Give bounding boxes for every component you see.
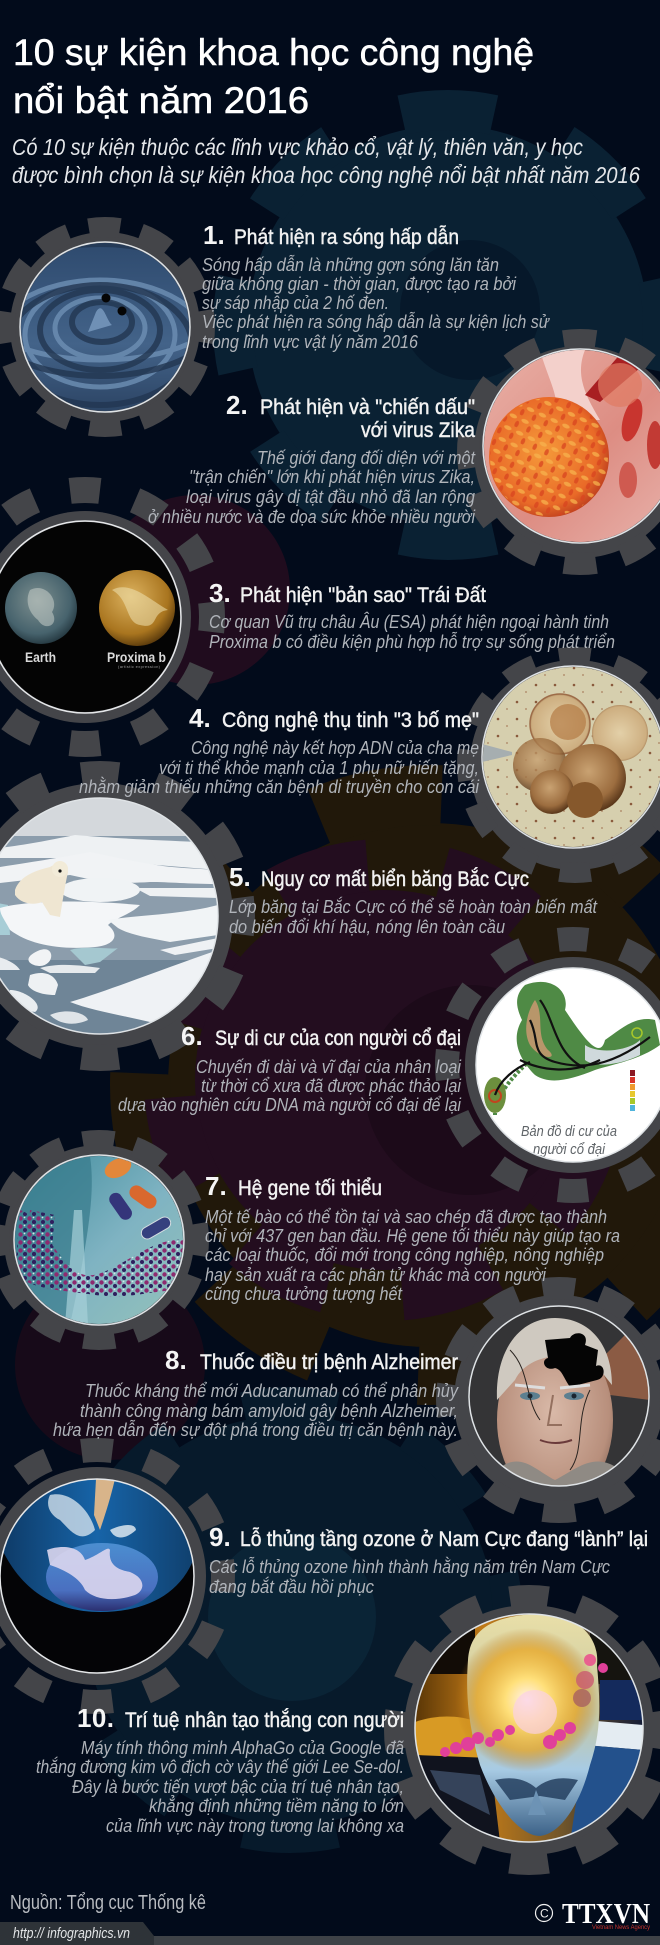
- heading 6: 6.: [181, 1021, 203, 1051]
- photo: Zika virus: [484, 350, 660, 542]
- gear 6: [447, 939, 660, 1191]
- body 7: chỉ với 437 gen ban đầu. Hệ gene tối thiểu này giúp tạo ra: [205, 1226, 620, 1246]
- body 3: Cơ quan Vũ trụ châu Âu (ESA) phát hiện ngoại hành tinh: [209, 612, 609, 632]
- photo: Earth and Proxima b: [0, 522, 180, 712]
- body 2: "trận chiến" lớn khi phát hiện virus Zika,: [189, 467, 475, 487]
- body 4: nhằm giảm thiểu những căn bệnh di truyền cho con cái: [79, 777, 480, 797]
- gear 4: [467, 657, 660, 873]
- body 1: trong lĩnh vực vật lý năm 2016: [202, 332, 419, 352]
- photo ring 5: [0, 798, 218, 1034]
- body 5: Lớp băng tại Bắc Cực có thể sẽ hoàn toàn biến mất: [229, 897, 598, 917]
- logo TTXVN: TTXVN: [562, 1899, 650, 1930]
- photo: gravitational waves: [21, 243, 189, 411]
- body 7: các loại thuốc, đổi mới trong công nghiệp, nông nghiệp: [205, 1245, 604, 1265]
- photo ring 2: [483, 349, 660, 543]
- body 9: Các lỗ thủng ozone hình thành hằng năm trên Nam Cực: [209, 1557, 610, 1577]
- map: migration of ancient humans: [476, 968, 660, 1162]
- heading 7: [205, 1171, 382, 1201]
- body 7: hay sản xuất ra các phân tử khác mà con người: [205, 1265, 547, 1285]
- gear 3: [0, 490, 212, 744]
- body 10: khẳng định những tiềm năng to lớn: [149, 1795, 404, 1816]
- body 9: đang bắt đầu hồi phục: [209, 1577, 374, 1597]
- heading 5: 5.: [229, 862, 251, 892]
- body 4: với ti thể khỏe mạnh của 1 phụ nữ hiến tặng,: [159, 758, 479, 778]
- photo: artificial intelligence head: [415, 1614, 650, 1842]
- title: 10 sự kiện khoa học công nghệ: [13, 32, 534, 73]
- title: nổi bật năm 2016: [13, 80, 309, 121]
- gear 9: [0, 1450, 223, 1702]
- heading 5: [229, 862, 529, 892]
- photo ring 6: [476, 968, 660, 1162]
- footer URL tab: http:// infographics.vn: [13, 1926, 130, 1942]
- photo: Earth and Proxima b: Earth: [25, 649, 56, 665]
- body 10: Máy tính thông minh AlphaGo của Google đã: [81, 1738, 404, 1758]
- gear 8: [447, 1288, 660, 1512]
- heading 10: Trí tuệ nhân tạo thắng con người: [125, 1709, 404, 1732]
- gear 7: [0, 1140, 199, 1340]
- heading 4: 4.: [189, 703, 211, 733]
- background gear: teal bottom: [72, 1402, 508, 1838]
- photo: Earth and Proxima b: Proxima b: [107, 649, 166, 665]
- heading 4: Công nghệ thụ tinh "3 bố mẹ": [222, 709, 479, 732]
- photo ring 8: [469, 1306, 649, 1486]
- heading 7: Hệ gene tối thiểu: [238, 1177, 382, 1200]
- subtitle: [12, 134, 640, 188]
- source: Nguồn: Tổng cục Thống kê: [10, 1892, 206, 1914]
- footer bar: [0, 1936, 660, 1945]
- body 5: [229, 897, 598, 937]
- heading 1: [203, 220, 459, 250]
- heading 2: 2.: [226, 390, 248, 420]
- background gear: small maroon: [100, 495, 290, 685]
- heading 10: [77, 1703, 404, 1733]
- heading 4: [189, 703, 479, 733]
- gear 5: [0, 774, 242, 1058]
- gear 10: [397, 1598, 660, 1862]
- heading 9: [209, 1522, 648, 1552]
- logo TTXVN: C: [540, 1906, 549, 1920]
- heading 8: [165, 1345, 458, 1375]
- footer URL tab: [0, 1922, 154, 1945]
- body 7: [205, 1207, 620, 1304]
- gear 2: [468, 340, 660, 564]
- body 6: từ thời cổ xưa đã được phác thảo lại: [201, 1076, 462, 1096]
- body 6: [118, 1057, 462, 1115]
- heading 2: Phát hiện và "chiến dấu": [260, 396, 475, 419]
- photo ring 3: [0, 521, 181, 713]
- photo: Earth and Proxima b: (artistic expression): [118, 664, 161, 669]
- background gear: olive: [94, 749, 660, 1421]
- gear 1: [5, 227, 205, 427]
- heading 5: Nguy cơ mất biển băng Bắc Cực: [261, 868, 529, 891]
- background gear: maroon: [117, 812, 653, 1348]
- background gear: teal top: [233, 110, 660, 540]
- photo: ozone hole, Earth: [0, 1479, 194, 1680]
- body 7: cũng chưa tưởng tượng hết: [205, 1284, 403, 1304]
- heading 3: Phát hiện "bản sao" Trái Đất: [240, 584, 486, 607]
- heading 8: Thuốc điều trị bệnh Alzheimer: [200, 1351, 458, 1374]
- body 3: Proxima b có điều kiện phù hợp hỗ trợ sự sống phát triển: [209, 632, 615, 652]
- body 10: Đây là bước tiến vượt bậc của trí tuệ nhân tạo,: [72, 1777, 404, 1797]
- body 1: sự sáp nhập của 2 hố đen.: [202, 293, 389, 313]
- body 5: do biến đổi khí hậu, nóng lên toàn cầu: [229, 917, 505, 937]
- subtitle: Có 10 sự kiện thuộc các lĩnh vực khảo cổ, vật lý, thiên văn, y học: [12, 134, 583, 160]
- photo ring 1: [20, 242, 190, 412]
- photo: polar bear on sea ice: [0, 798, 218, 1040]
- body 8: hứa hẹn dẫn đến sự đột phá trong điều trị căn bệnh này.: [53, 1420, 458, 1440]
- body 1: giữa không gian - thời gian, được tạo ra bởi: [202, 274, 517, 294]
- body 8: thành công màng bám amyloid gây bệnh Alzheimer,: [80, 1401, 458, 1421]
- body 10: thắng đương kim vô địch cờ vây thế giới Lee Se-dol.: [36, 1757, 404, 1777]
- body 2: loại virus gây dị tật đầu nhỏ đã lan rộng: [186, 487, 475, 507]
- body 1: Sóng hấp dẫn là những gợn sóng lăn tăn: [202, 255, 499, 275]
- body 2: [148, 448, 476, 527]
- heading 2: với virus Zika: [361, 419, 475, 442]
- body 4: [79, 738, 480, 797]
- body 1: [202, 255, 550, 352]
- heading 3: 3.: [209, 578, 231, 608]
- body 8: Thuốc kháng thể mới Aducanumab có thể phân hủy: [85, 1381, 459, 1401]
- logo TTXVN: [536, 1899, 651, 1931]
- body 8: [53, 1381, 459, 1440]
- heading 8: 8.: [165, 1345, 187, 1375]
- photo ring 4: [482, 666, 660, 848]
- heading 1: Phát hiện ra sóng hấp dẫn: [234, 226, 459, 249]
- body 6: dựa vào nghiên cứu DNA mà người cổ đại để lại: [118, 1095, 462, 1115]
- heading 6: [181, 1021, 461, 1051]
- heading 7: 7.: [205, 1171, 227, 1201]
- heading 6: Sự di cư của con người cổ đại: [215, 1027, 461, 1050]
- photo ring 9: [0, 1479, 194, 1673]
- photo ring 10: [415, 1614, 643, 1842]
- photo: elderly man with puzzle: [470, 1306, 648, 1486]
- heading 9: 9.: [209, 1522, 231, 1552]
- photo: DNA and capsules: [15, 1154, 185, 1325]
- body 2: ở nhiều nước và đe dọa sức khỏe nhiều người: [148, 507, 476, 527]
- body 6: Chuyến đi dài và vĩ đại của nhân loại: [196, 1057, 462, 1077]
- body 10: của lĩnh vực này trong tương lai không xa: [106, 1816, 404, 1836]
- body 3: [209, 612, 615, 652]
- heading 2: [226, 390, 475, 442]
- map: migration of ancient humans: người cổ đại: [533, 1141, 606, 1158]
- body 9: [209, 1557, 610, 1597]
- body 10: [36, 1738, 404, 1836]
- heading 3: [209, 578, 486, 608]
- heading 10: 10.: [77, 1703, 114, 1733]
- map: migration of ancient humans: Bản đồ di cư của: [521, 1123, 617, 1140]
- body 2: Thế giới đang đối diện với một: [257, 448, 476, 468]
- logo TTXVN: Vietnam News Agency: [592, 1924, 651, 1931]
- body 1: Việc phát hiện ra sóng hấp dẫn là sự kiện lịch sử: [202, 312, 550, 332]
- background gear: small maroon lower: [15, 1270, 205, 1460]
- photo: embryo: [482, 666, 660, 848]
- title: [13, 32, 534, 121]
- body 4: Công nghệ này kết hợp ADN của cha mẹ: [191, 738, 479, 758]
- photo ring 7: [14, 1155, 184, 1325]
- heading 1: 1.: [203, 220, 225, 250]
- body 7: Một tế bào có thể tồn tại và sao chép đã được tạo thành: [205, 1207, 607, 1227]
